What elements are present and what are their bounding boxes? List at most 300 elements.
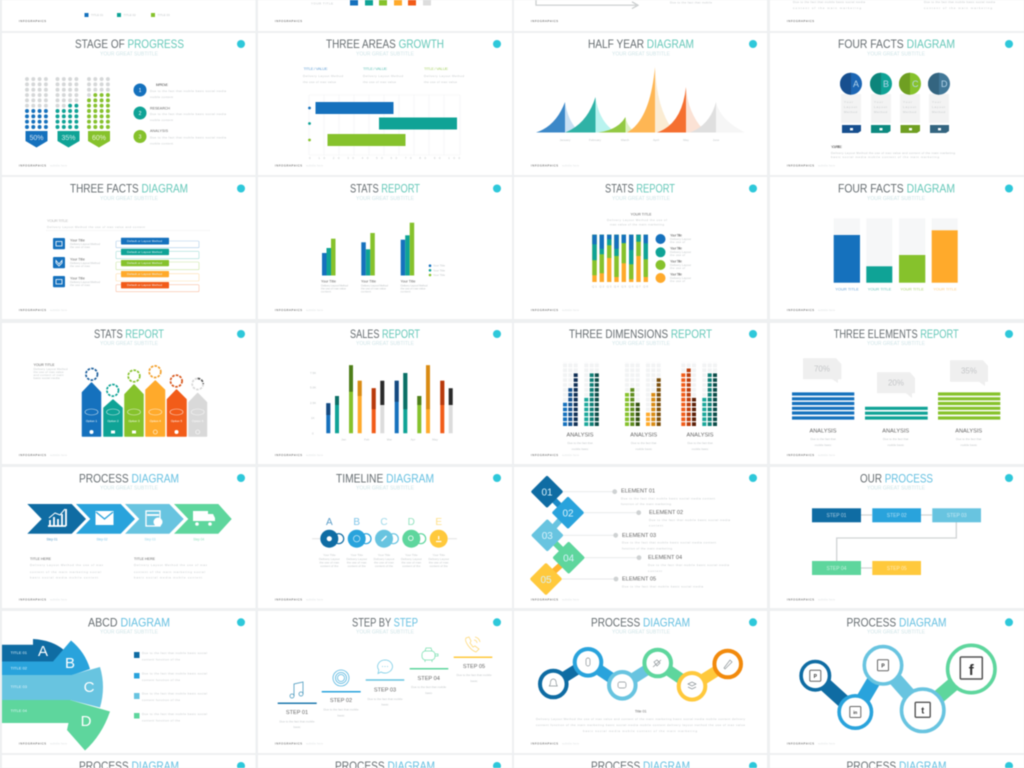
element texts: ELEMENT 01 bbox=[621, 488, 655, 494]
step captions: Due to the fact that mobile bbox=[456, 673, 492, 677]
cards: Your bbox=[903, 100, 912, 104]
bottom tabs bbox=[842, 125, 949, 133]
node captions: content of the bbox=[320, 564, 339, 568]
side list: Due to the fact that mobile basic social bbox=[142, 712, 207, 716]
captions: mobile basic bbox=[572, 447, 589, 451]
circle legend: Delivery Layout bbox=[670, 276, 691, 280]
captions: Due to the fact that bbox=[810, 437, 836, 441]
captions bbox=[567, 432, 714, 451]
heading: Delivery Layout Method the use of max value and content bbox=[47, 225, 145, 229]
captions: Due to the fact that bbox=[687, 441, 713, 445]
step captions: basic bbox=[293, 725, 301, 729]
text blocks: basic social media mobile content bbox=[134, 576, 202, 580]
footer: subtitle here bbox=[306, 742, 323, 746]
captions: Due to the fact that bbox=[631, 441, 657, 445]
heading bbox=[607, 212, 667, 226]
step lines bbox=[278, 657, 492, 703]
footer bbox=[19, 308, 67, 312]
panel: top slide fragment with text bbox=[770, 0, 1024, 31]
x axis labels bbox=[341, 438, 438, 442]
month labels: February bbox=[589, 138, 601, 142]
percent tags: 60% bbox=[92, 135, 106, 142]
subtitle: YOUR GREAT SUBTITLE bbox=[867, 196, 926, 202]
step boxes: STEP 02 bbox=[887, 513, 907, 519]
panel: top slide fragment with colour squares bbox=[258, 0, 512, 31]
group captions: content bbox=[361, 290, 371, 294]
segment letters: D bbox=[81, 713, 92, 730]
speech bubbles: 35% bbox=[961, 366, 977, 376]
list: RESEARCH bbox=[150, 106, 170, 110]
footer: subtitle here bbox=[562, 308, 579, 312]
chevron icons bbox=[48, 509, 215, 526]
title: PROCESS DIAGRAM bbox=[846, 616, 946, 630]
side list: Due to the fact that mobile basic social bbox=[142, 692, 207, 696]
node captions: content of the bbox=[402, 564, 421, 568]
panel: three facts diagram bbox=[2, 177, 256, 319]
subtitle: YOUR GREAT SUBTITLE bbox=[867, 341, 926, 347]
diamond numbers bbox=[540, 488, 575, 586]
diamonds bbox=[532, 478, 583, 593]
footer: subtitle here bbox=[50, 164, 67, 168]
captions: ANALYSIS bbox=[567, 432, 594, 438]
step captions: STEP 04 bbox=[418, 676, 440, 682]
side text: and content of main bbox=[34, 373, 64, 377]
legend bbox=[84, 13, 170, 17]
colour squares bbox=[350, 0, 431, 6]
footer: INFOGRAPHICS bbox=[787, 164, 814, 168]
bar chart bbox=[834, 218, 958, 283]
footer: INFOGRAPHICS bbox=[275, 453, 302, 457]
icon cards: the use of max bbox=[70, 283, 90, 287]
badge bbox=[1005, 184, 1013, 192]
step labels: Step 02 bbox=[96, 538, 108, 542]
heading: max value of the main marketing bbox=[610, 222, 664, 226]
element texts: ELEMENT 05 bbox=[622, 576, 656, 582]
panel: sales report bbox=[258, 323, 512, 464]
captions bbox=[810, 428, 982, 447]
segment labels: TITLE 03 bbox=[10, 684, 28, 689]
circle legend: the use of bbox=[670, 266, 685, 270]
letters: C bbox=[380, 517, 388, 528]
step captions: STEP 02 bbox=[330, 698, 352, 704]
subtitle: YOUR GREAT SUBTITLE bbox=[356, 51, 415, 57]
footer: subtitle here bbox=[818, 598, 835, 602]
timeline nodes bbox=[312, 530, 457, 548]
step captions: basic bbox=[425, 691, 433, 695]
footer: INFOGRAPHICS bbox=[787, 598, 814, 602]
column headers: the use of max value bbox=[363, 80, 396, 84]
node captions: Your Title bbox=[323, 553, 336, 557]
node captions: the use of max bbox=[347, 560, 367, 564]
text blocks: Delivery Layout Method the use of max bbox=[30, 563, 103, 567]
gantt chart: 0 10 20 30 40 50 60 70 80 90 100 bbox=[309, 156, 460, 160]
group captions: Your Title bbox=[361, 280, 376, 284]
step boxes: STEP 04 bbox=[827, 566, 847, 572]
text blocks: content of the main marketing social bbox=[134, 570, 205, 574]
heading bbox=[46, 218, 210, 230]
footer: INFOGRAPHICS bbox=[19, 598, 46, 602]
circle legend: Your Title bbox=[670, 246, 682, 250]
chevrons bbox=[27, 504, 232, 534]
subtitle: YOUR GREAT SUBTITLE bbox=[867, 485, 926, 491]
step captions: basic bbox=[470, 679, 478, 683]
column headers: the use of max value bbox=[303, 80, 336, 84]
cards: Method bbox=[903, 110, 916, 114]
footer: subtitle here bbox=[818, 164, 835, 168]
badge bbox=[237, 474, 245, 482]
panel: half year diagram bbox=[514, 33, 767, 175]
step boxes: STEP 03 bbox=[947, 513, 967, 519]
panel: step by step bbox=[258, 611, 512, 753]
panel: top-left slide fragment with legend bbox=[2, 0, 256, 31]
chain connectors bbox=[553, 662, 728, 686]
footer bbox=[275, 742, 323, 746]
footer: subtitle here bbox=[306, 308, 323, 312]
captions: ANALYSIS bbox=[882, 428, 909, 434]
panel: process diagram social bbox=[770, 611, 1024, 753]
column headers: TITLE / VALUE bbox=[304, 66, 328, 71]
footer: INFOGRAPHICS bbox=[531, 742, 558, 746]
footer: INFOGRAPHICS bbox=[275, 19, 302, 23]
panel: our process bbox=[770, 467, 1024, 608]
coloured labels: Default or Layout Method bbox=[127, 261, 162, 265]
leader lines bbox=[562, 489, 641, 581]
title: HALF YEAR DIAGRAM bbox=[588, 37, 694, 51]
title: STATS REPORT bbox=[350, 182, 421, 196]
footer bbox=[19, 453, 67, 457]
subtitle: YOUR GREAT SUBTITLE bbox=[356, 485, 415, 491]
subtitle: YOUR GREAT SUBTITLE bbox=[356, 629, 415, 635]
list: Due to the fact that mobile basic social media bbox=[150, 112, 226, 116]
percent tags bbox=[26, 131, 110, 148]
arrow contents: Option 4 bbox=[150, 419, 161, 423]
coloured labels: Default or Layout Method bbox=[127, 272, 162, 276]
step captions bbox=[279, 664, 492, 729]
side list: content function of the bbox=[142, 658, 180, 662]
y axis labels: 2.5K bbox=[310, 401, 316, 405]
badge bbox=[749, 474, 757, 482]
step captions: Due to the fact that mobile bbox=[279, 720, 315, 724]
footer: INFOGRAPHICS bbox=[531, 598, 558, 602]
icon cards: the use of max bbox=[70, 264, 90, 268]
node captions: content of the bbox=[348, 564, 366, 568]
footer: subtitle here bbox=[50, 598, 67, 602]
segment labels: TITLE 02 bbox=[10, 666, 28, 670]
badge bbox=[237, 762, 245, 768]
element texts bbox=[621, 488, 730, 588]
diamond numbers: 03 bbox=[542, 531, 553, 542]
title: PROCESS DIAGRAM bbox=[79, 472, 179, 486]
connectors bbox=[815, 665, 971, 712]
caption bbox=[831, 145, 955, 159]
icon cards: Your Title bbox=[70, 276, 85, 280]
footer: subtitle here bbox=[818, 453, 835, 457]
side text: YOUR TITLE bbox=[34, 363, 55, 367]
bar labels: YOUR TITLE bbox=[933, 286, 957, 292]
circle legend: Delivery Layout bbox=[670, 263, 691, 267]
title: STATS REPORT bbox=[94, 327, 165, 341]
month labels: March bbox=[621, 138, 629, 142]
legend: TITLE 01 bbox=[91, 13, 104, 17]
gantt chart bbox=[308, 95, 460, 160]
icon cards: Delivery Layout Method bbox=[70, 261, 100, 265]
text blocks: TITLE HERE bbox=[134, 557, 156, 561]
captions: mobile basic bbox=[887, 443, 905, 447]
diamond numbers: 02 bbox=[562, 508, 574, 520]
node captions: the use of max bbox=[401, 560, 422, 564]
month labels: May bbox=[683, 138, 689, 142]
circle legend bbox=[656, 234, 691, 283]
subtitle: YOUR GREAT SUBTITLE bbox=[100, 196, 159, 202]
group captions: Your Title bbox=[400, 280, 416, 284]
y axis labels: 0 bbox=[312, 432, 314, 436]
group captions: the use of max value bbox=[400, 286, 426, 290]
captions: Due to the fact that bbox=[567, 441, 593, 445]
cards: Method bbox=[874, 110, 887, 114]
segment labels bbox=[10, 650, 28, 713]
heading: YOUR TITLE bbox=[47, 218, 68, 223]
node captions: content of the bbox=[375, 564, 393, 568]
list: mobile content bbox=[150, 142, 173, 146]
chain rings bbox=[540, 649, 741, 700]
dot columns bbox=[565, 362, 715, 426]
footer: subtitle here bbox=[306, 598, 323, 602]
footer: INFOGRAPHICS bbox=[275, 164, 302, 168]
title: THREE FACTS DIAGRAM bbox=[70, 182, 188, 196]
badge bbox=[237, 40, 245, 48]
panel: bottom row slide 3 bbox=[514, 755, 767, 768]
side text: basic social media bbox=[34, 376, 60, 380]
social glyphs bbox=[814, 662, 975, 716]
list: Due to the fact that mobile basic social media bbox=[150, 89, 226, 93]
column headers: TITLE / VALUE bbox=[424, 66, 448, 71]
social glyphs: P bbox=[881, 664, 885, 670]
side list: Due to the fact that mobile basic social bbox=[142, 672, 207, 676]
footer: subtitle here bbox=[306, 453, 323, 457]
node captions bbox=[319, 553, 449, 568]
legend: TITLE 02 bbox=[124, 13, 136, 17]
column headers: Delivery Layout Method bbox=[424, 74, 464, 78]
subtitle: YOUR GREAT SUBTITLE bbox=[356, 341, 415, 347]
letters bbox=[326, 517, 442, 528]
footer: INFOGRAPHICS bbox=[787, 308, 814, 312]
small label: YOUR TITLE bbox=[311, 2, 333, 6]
list: mobile content bbox=[150, 95, 173, 99]
list bbox=[134, 83, 226, 146]
diamond numbers: 04 bbox=[563, 554, 575, 564]
caption: Title 01 bbox=[635, 710, 647, 714]
cards bbox=[841, 94, 949, 123]
percent tags: 35% bbox=[61, 135, 76, 142]
caption: content function of the main marketing basic social media mobile content delivery layout method the use of max value bbox=[536, 723, 745, 727]
step captions: Due to the fact that mobile bbox=[367, 697, 403, 701]
footer: subtitle here bbox=[306, 164, 323, 168]
rings bbox=[801, 645, 995, 732]
group captions: the use of max value bbox=[321, 286, 346, 290]
footer: INFOGRAPHICS bbox=[19, 19, 46, 23]
node captions: Delivery Layout bbox=[428, 557, 449, 561]
node captions: Your Title bbox=[432, 553, 445, 557]
step labels bbox=[46, 538, 204, 542]
caption: basic social media mobile content of the main marketing bbox=[831, 155, 939, 159]
legend bbox=[429, 264, 445, 277]
column headers: TITLE / VALUE bbox=[363, 66, 387, 71]
subtitle: YOUR GREAT SUBTITLE bbox=[100, 629, 159, 635]
badge bbox=[749, 40, 757, 48]
panel: process diagram chevrons bbox=[2, 467, 256, 608]
badge bbox=[749, 184, 757, 192]
side list: content function of the bbox=[142, 718, 180, 722]
bar labels: YOUR TITLE bbox=[868, 286, 892, 292]
node captions: the use of max bbox=[374, 560, 394, 564]
arrow contents: Option 1 bbox=[86, 419, 98, 423]
legend: Your Title bbox=[433, 273, 445, 277]
footer: subtitle here bbox=[562, 742, 579, 746]
footer bbox=[531, 742, 579, 746]
node captions: content of the bbox=[430, 564, 448, 568]
element texts: Due to the fact that mobile basic social media content bbox=[622, 540, 716, 544]
badge bbox=[493, 330, 501, 338]
side list: Due to the fact that mobile basic social bbox=[142, 651, 207, 655]
icon cards: Your Title bbox=[70, 238, 85, 242]
bar labels: YOUR TITLE bbox=[900, 286, 924, 292]
list: 2 bbox=[139, 111, 142, 117]
text blocks: content of the main marketing social bbox=[30, 570, 101, 574]
title: THREE ELEMENTS REPORT bbox=[834, 327, 959, 341]
step captions: basic bbox=[381, 702, 389, 706]
letter circles: D bbox=[941, 79, 948, 89]
letter circles: A bbox=[853, 79, 859, 89]
title: OUR PROCESS bbox=[860, 472, 933, 486]
footer: INFOGRAPHICS bbox=[275, 742, 302, 746]
legend: TITLE 03 bbox=[158, 13, 170, 17]
step icons bbox=[290, 637, 480, 698]
group captions: content bbox=[321, 290, 331, 294]
two-tone bars bbox=[328, 365, 451, 433]
element texts: ELEMENT 03 bbox=[622, 533, 656, 539]
arrow contents bbox=[85, 409, 204, 434]
striped bars bbox=[792, 394, 1000, 418]
title: SALES REPORT bbox=[350, 327, 421, 341]
footer bbox=[787, 308, 835, 312]
group captions: Delivery Layout Method bbox=[361, 284, 388, 288]
list: ANALYSIS bbox=[150, 129, 169, 133]
month labels: April bbox=[653, 138, 659, 142]
footer: subtitle here bbox=[50, 453, 67, 457]
arrow contents: Option 3 bbox=[128, 419, 140, 423]
legend: Your Title bbox=[433, 264, 445, 268]
cards: Layout bbox=[932, 105, 945, 109]
side list: content function of the bbox=[142, 678, 180, 682]
footer bbox=[275, 164, 323, 168]
panel: stats report stacked bars bbox=[514, 177, 767, 319]
segment letters bbox=[38, 643, 95, 730]
coloured labels bbox=[121, 238, 169, 288]
step captions: STEP 03 bbox=[374, 688, 396, 694]
footer: subtitle here bbox=[562, 598, 579, 602]
badge bbox=[749, 330, 757, 338]
speech bubbles bbox=[803, 358, 988, 398]
outlined bars bbox=[116, 241, 199, 292]
step captions: Due to the fact that mobile bbox=[411, 685, 447, 689]
title: THREE DIMENSIONS REPORT bbox=[569, 327, 713, 341]
step captions: Due to the fact that mobile bbox=[323, 708, 359, 712]
subtitle: YOUR GREAT SUBTITLE bbox=[867, 629, 926, 635]
coloured labels: Default or Layout Method bbox=[127, 250, 162, 254]
step labels: Step 03 bbox=[144, 538, 156, 542]
panel: four facts diagram bars bbox=[770, 177, 1024, 319]
stacked bars bbox=[594, 235, 646, 282]
panel: bottom row slide 4 bbox=[770, 755, 1024, 768]
footer bbox=[275, 453, 323, 457]
circle legend: the use of bbox=[670, 279, 685, 283]
badge bbox=[493, 40, 501, 48]
cards: Method bbox=[844, 110, 857, 114]
group captions: the use of max value bbox=[361, 286, 386, 290]
footer bbox=[787, 453, 835, 457]
step captions: STEP 05 bbox=[463, 664, 485, 670]
panel: stats report grouped bars bbox=[258, 177, 512, 319]
footer bbox=[275, 598, 323, 602]
footer: subtitle here bbox=[562, 164, 579, 168]
letters: D bbox=[408, 517, 415, 528]
legend: Your Title bbox=[433, 268, 445, 272]
title: ABCD DIAGRAM bbox=[88, 616, 170, 630]
circle legend: Your Title bbox=[670, 272, 682, 276]
subtitle: YOUR GREAT SUBTITLE bbox=[612, 341, 671, 347]
badge bbox=[749, 762, 757, 768]
month labels bbox=[560, 138, 720, 142]
segment labels: TITLE 04 bbox=[10, 708, 28, 713]
group captions: content bbox=[400, 290, 411, 294]
node captions: Your Title bbox=[378, 553, 391, 557]
group captions: Your Title bbox=[321, 280, 336, 284]
segment letters: B bbox=[65, 655, 75, 672]
column headers: the use of max value bbox=[424, 80, 457, 84]
list: 3 bbox=[139, 134, 142, 140]
cards: Your bbox=[844, 100, 853, 104]
panel: diamond elements bbox=[514, 467, 767, 608]
panel: four facts diagram circles bbox=[770, 33, 1024, 175]
element texts: function of the main marketing bbox=[622, 546, 672, 550]
footer: INFOGRAPHICS bbox=[275, 308, 302, 312]
paragraphs: Due to the fact that mobile basic social media bbox=[793, 0, 865, 4]
circle legend: Delivery Layout bbox=[670, 237, 691, 241]
circle legend: Your Title bbox=[670, 234, 682, 238]
side list bbox=[134, 651, 207, 722]
title: TIMELINE DIAGRAM bbox=[336, 472, 434, 486]
element texts: ELEMENT 04 bbox=[648, 555, 682, 561]
subtitle: YOUR GREAT SUBTITLE bbox=[100, 341, 159, 347]
dashed rings bbox=[86, 366, 203, 396]
segment letters: C bbox=[84, 679, 95, 696]
element texts: Due to the fact that mobile basic social media bbox=[622, 584, 703, 588]
footer: subtitle here bbox=[50, 308, 67, 312]
icon cards: Delivery Layout Method bbox=[70, 242, 100, 246]
subtitle: YOUR GREAT SUBTITLE bbox=[612, 196, 671, 202]
footer: INFOGRAPHICS bbox=[787, 19, 814, 23]
curved segments bbox=[2, 639, 110, 750]
letters: B bbox=[353, 517, 360, 528]
footer bbox=[787, 164, 835, 168]
title: THREE AREAS GROWTH bbox=[326, 37, 444, 51]
diamond numbers: 01 bbox=[541, 488, 553, 498]
element texts: Due to the fact that mobile basic social media bbox=[649, 518, 730, 522]
element texts: Due to the fact that mobile basic social media content bbox=[621, 496, 715, 500]
arrow contents: Option 2 bbox=[107, 419, 119, 423]
captions: ANALYSIS bbox=[810, 428, 837, 434]
footer: subtitle here bbox=[562, 453, 579, 457]
